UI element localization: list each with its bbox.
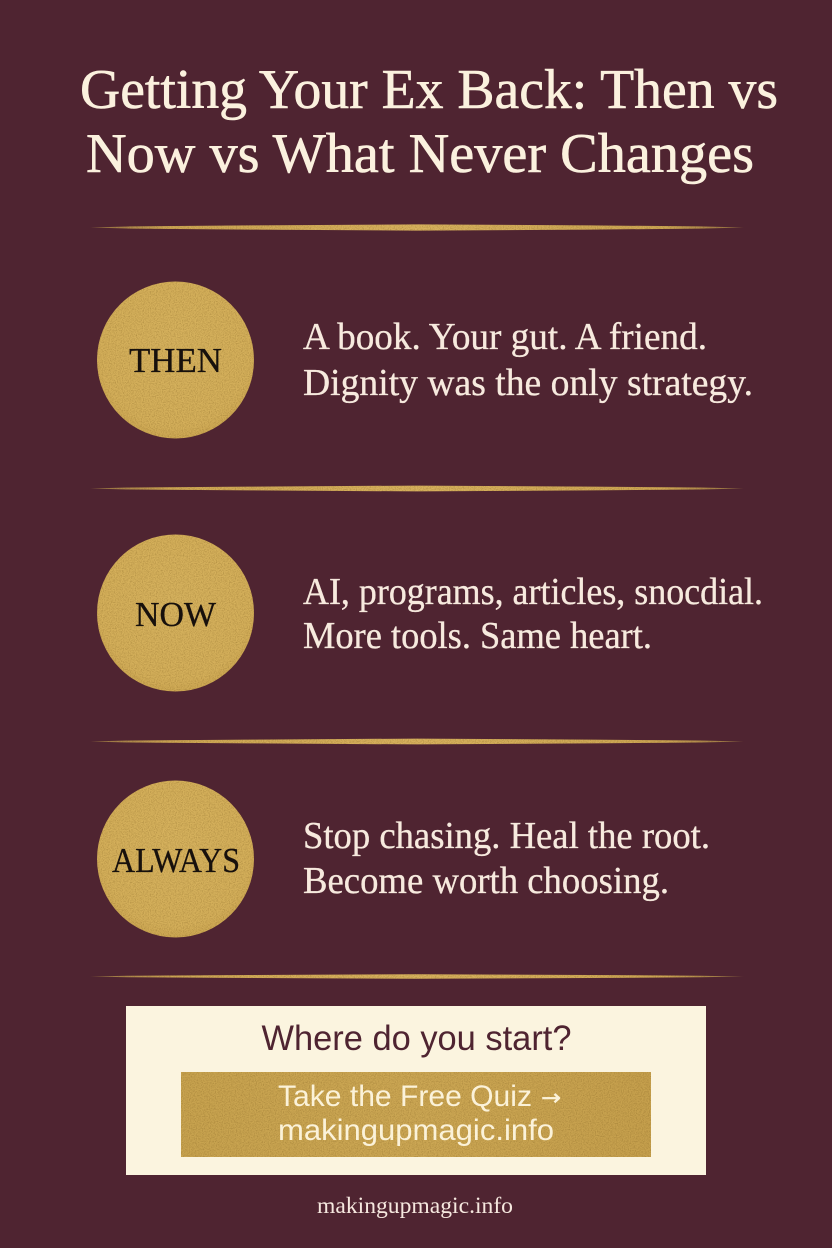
text block: then: Dignity was the only strategy. [303,362,753,404]
text block: now [303,571,763,657]
icon: then badge: THEN [129,341,222,380]
panel: always [97,780,710,938]
button: take the free quiz: makingupmagic.info [278,1114,554,1147]
text block: now: More tools. Same heart. [303,615,652,657]
icon: always badge: ALWAYS [112,841,240,880]
text block: now: AI, programs, articles, snocdial. [303,571,763,613]
text block: always [303,815,710,902]
title: Now vs What Never Changes [86,123,754,185]
text block: always: Stop chasing. Heal the root. [303,815,710,857]
text block: then [303,316,753,404]
icon: now badge: NOW [135,595,216,634]
icon: then badge [97,282,254,438]
title: Getting Your Ex Back: Then vs [80,59,778,121]
heading: where do you start: Where do you start? [262,1019,572,1058]
title [80,59,778,185]
text block: then: A book. Your gut. A friend. [303,316,707,358]
icon: always badge [97,780,254,938]
footer url: makingupmagic.info [317,1193,513,1218]
panel: call to action [126,1006,706,1175]
button: take the free quiz: → [541,1086,561,1111]
text block: always: Become worth choosing. [303,860,669,902]
icon: now badge [97,534,254,692]
button: take the free quiz [181,1072,651,1157]
panel: now [97,534,763,692]
panel: then [97,282,753,438]
button: take the free quiz: Take the Free Quiz [278,1080,532,1113]
